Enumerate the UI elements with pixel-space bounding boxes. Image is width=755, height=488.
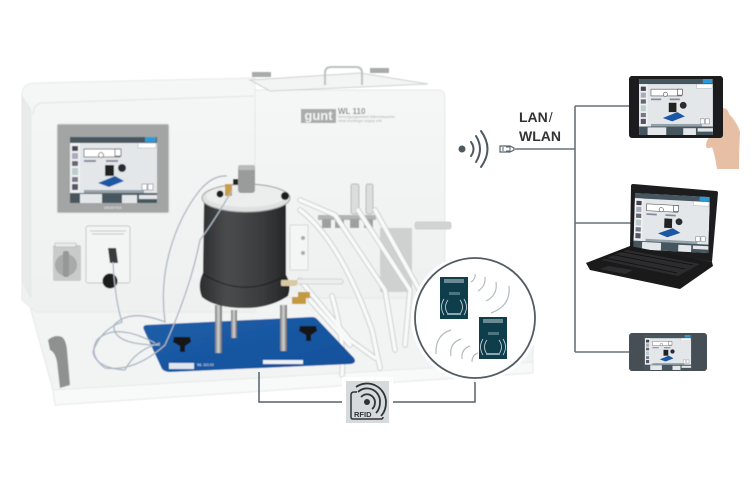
valve fitting: [415, 222, 451, 229]
touch panel: WEINTEK: [104, 205, 122, 210]
RFID module 2: [479, 317, 507, 359]
machine: WL 110 trainer base and housing: [22, 67, 533, 405]
insulated tank: [200, 165, 290, 308]
icon: wireless signal: [458, 131, 488, 167]
connector lines to RFID badge: [259, 372, 475, 402]
tank legs: [215, 305, 287, 353]
tablet body: [629, 76, 723, 138]
carrying handle: [48, 336, 70, 388]
label: LAN/WLAN: [519, 109, 561, 144]
RFID module 1: [440, 277, 468, 319]
label: LAN/WLAN: WLAN: [519, 128, 561, 144]
right housing: [255, 90, 445, 298]
model label: Versorgungseinheit Wärmetauscher: [338, 115, 396, 119]
blue base plate with label: [143, 317, 355, 372]
bracket: [380, 228, 412, 292]
tablet held in hand: [629, 76, 740, 169]
gunt logo: gunt: [304, 108, 333, 123]
model label: Heat exchanger supply unit: [338, 119, 382, 123]
white hoses: [300, 200, 425, 375]
laptop: [586, 184, 718, 289]
hand: [706, 108, 740, 169]
right side connector panel: [290, 225, 308, 270]
sensor tubes and manifold: [318, 184, 376, 228]
icon: network plug: [500, 146, 514, 152]
lid handle: [325, 67, 362, 85]
laptop keyboard deck: [586, 246, 713, 289]
louvers: [22, 96, 31, 298]
left housing: [22, 78, 255, 312]
radio waves: [436, 274, 509, 362]
brass fittings: [281, 280, 310, 304]
callout: RFID cards in circle: [411, 254, 539, 382]
tablet screen: [639, 79, 713, 135]
lid hinges: [252, 68, 389, 77]
lid: [250, 73, 428, 91]
base plate front lip: [53, 362, 533, 405]
white tee fitting: [297, 279, 343, 284]
RFID badge: [342, 377, 393, 427]
sensor cables: [93, 176, 232, 370]
touch panel: [57, 124, 169, 213]
model label: [338, 107, 396, 123]
blue base plate with label: WL 110.03: [197, 363, 214, 367]
base plate: [22, 278, 533, 405]
clamping knobs: [173, 326, 317, 352]
laptop lid: [630, 184, 718, 262]
network lines: [515, 106, 632, 352]
main switch: [53, 243, 81, 281]
RFID badge: RFID: [354, 410, 372, 419]
model label: WL 110: [338, 107, 366, 116]
laptop screen: [633, 193, 710, 253]
smartphone: [629, 333, 707, 371]
connector panel: [86, 226, 130, 288]
label: LAN/WLAN: LAN/: [519, 109, 553, 125]
